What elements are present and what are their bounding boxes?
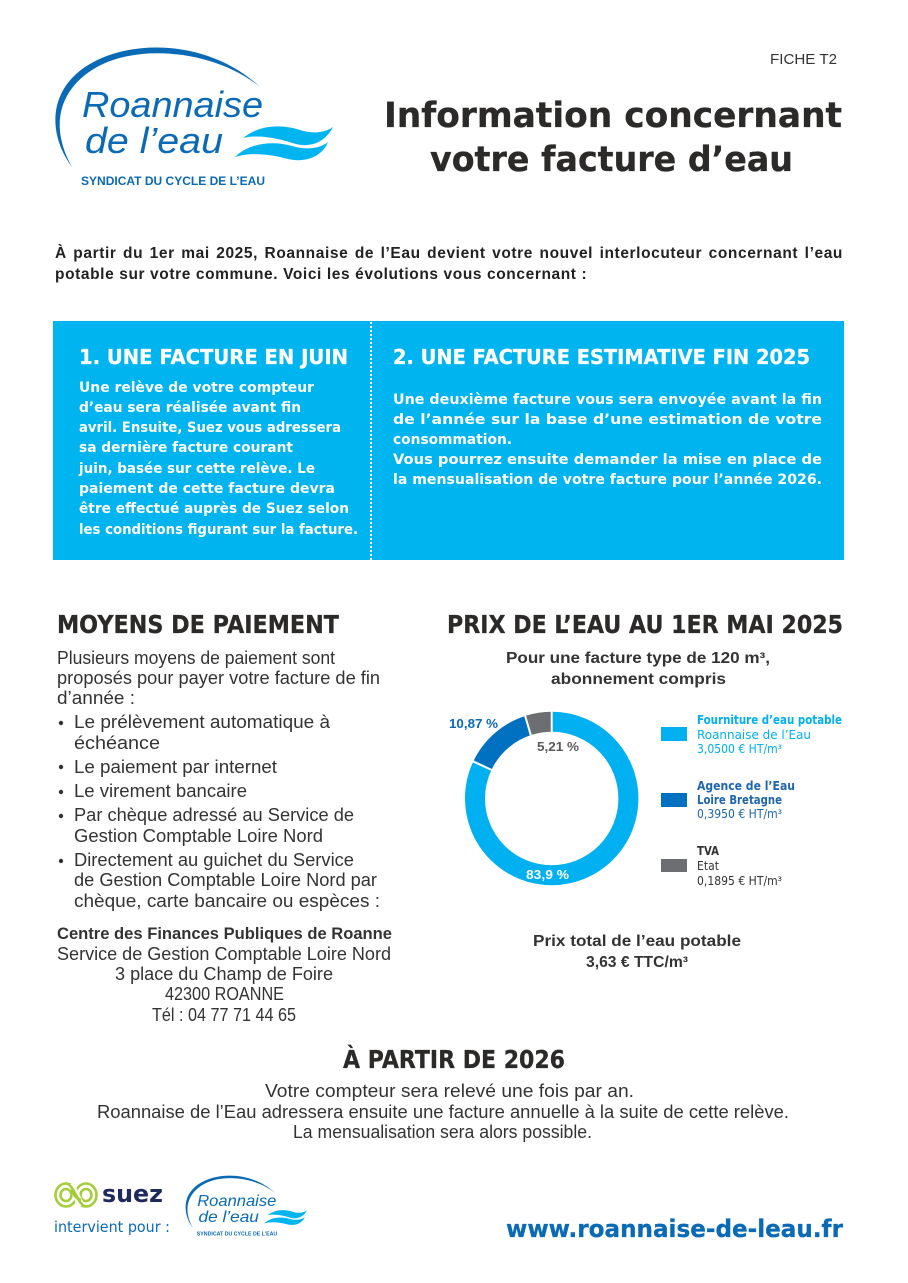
text block: moyens de paiement: de Gestion Comptable Loire Nord par <box>74 870 377 890</box>
address block: 3 place du Champ de Foire <box>115 964 333 984</box>
legend: TVA: TVA <box>697 844 720 858</box>
address block <box>57 925 392 1025</box>
text block: moyens de paiement: échéance <box>74 733 160 753</box>
text block: moyens de paiement: Le paiement par internet <box>74 757 277 777</box>
text block: à partir de 2026: La mensualisation sera alors possible. <box>293 1122 592 1142</box>
panel text: estimative <box>393 392 822 488</box>
panel heading: une facture en juin: 1. UNE FACTURE EN JUIN <box>79 345 348 369</box>
title <box>384 96 842 180</box>
fiche reference: FICHE T2 <box>770 52 837 68</box>
heading: moyens de paiement: MOYENS DE PAIEMENT <box>57 610 339 639</box>
panel text: estimative: de l’année sur la base d’une estimation de votre <box>393 412 822 428</box>
logo: Roannaise de l'Eau: Roannaise <box>82 84 263 125</box>
subtitle: facture type: Pour une facture type de 120 m³, <box>506 650 770 667</box>
text block: moyens de paiement: Directement au guichet du Service <box>74 850 354 870</box>
subtitle: facture type: abonnement compris <box>551 671 726 688</box>
address block: Service de Gestion Comptable Loire Nord <box>57 944 391 964</box>
text block: à partir de 2026 <box>97 1081 789 1142</box>
text block: moyens de paiement: Plusieurs moyens de paiement sont <box>57 648 335 668</box>
legend: agence de l'eau: Loire Bretagne <box>697 793 782 807</box>
text block: moyens de paiement: Le virement bancaire <box>74 781 247 801</box>
total price: Prix total de l’eau potable <box>533 933 741 950</box>
address block: 42300 ROANNE <box>165 984 284 1004</box>
label: 83,9 %: 83,9 % <box>526 867 569 882</box>
logo: Roannaise de l'Eau <box>55 47 333 188</box>
panel heading: facture estimative: 2. UNE FACTURE ESTIMATIVE FIN 2025 <box>393 345 810 369</box>
text block: moyens de paiement <box>57 648 380 911</box>
logo: Roannaise de l'Eau small <box>186 1176 307 1238</box>
text block: moyens de paiement: Gestion Comptable Loire Nord <box>74 826 323 846</box>
address block: Tél : 04 77 71 44 65 <box>152 1005 296 1025</box>
text block: moyens de paiement: chèque, carte bancaire ou espèces : <box>74 891 380 911</box>
panel text: juin: être effectué auprès de Suez selon <box>79 501 349 517</box>
caption: intervient pour: intervient pour : <box>54 1218 170 1236</box>
legend: fourniture d'eau potable: Roannaise de l’Eau <box>697 728 811 742</box>
introduction text <box>55 244 843 283</box>
panel: factures <box>53 321 844 560</box>
legend: TVA: Etat <box>697 859 719 873</box>
address block: Centre des Finances Publiques de Roanne <box>57 925 392 943</box>
panel text: estimative: consommation. <box>393 432 512 448</box>
panel text: juin: avril. Ensuite, Suez vous adressera <box>79 420 341 436</box>
panel text: juin: paiement de cette facture devra <box>79 481 335 497</box>
website url: www.roannaise-de-leau.fr <box>506 1215 843 1243</box>
panel text: juin: sa dernière facture courant <box>79 440 293 456</box>
logo: Suez: suez <box>102 1180 163 1208</box>
logo: Roannaise de l'Eau small: Roannaise <box>197 1193 277 1210</box>
logo: Suez <box>56 1180 163 1208</box>
legend: agence de l'eau <box>661 779 795 821</box>
legend: fourniture d'eau potable: Fourniture d’eau potable <box>697 713 842 727</box>
text block: à partir de 2026: Votre compteur sera relevé une fois par an. <box>265 1081 634 1101</box>
introduction text: potable sur votre commune. Voici les évolutions vous concernant : <box>55 266 587 283</box>
legend: agence de l'eau: 0,3950 € HT/m³ <box>697 807 782 821</box>
legend: fourniture d'eau potable <box>661 713 842 756</box>
introduction text: À partir du 1er mai 2025, Roannaise de l’Eau devient votre nouvel interlocuteur concernant l’eau <box>55 245 843 262</box>
panel text: estimative: Vous pourrez ensuite demander la mise en place de <box>393 452 822 468</box>
panel text: juin: d’eau sera réalisée avant fin <box>79 400 301 416</box>
text block: moyens de paiement: proposés pour payer votre facture de fin <box>57 668 380 688</box>
heading: prix de l'eau: PRIX DE L’EAU AU 1ER MAI 2025 <box>447 610 843 639</box>
subtitle: facture type <box>506 650 770 688</box>
panel text: juin: juin, basée sur cette relève. Le <box>78 461 315 477</box>
title: votre facture d’eau <box>430 140 793 180</box>
legend: agence de l'eau: Agence de l’Eau <box>697 779 795 793</box>
legend: fourniture d'eau potable: 3,0500 € HT/m³ <box>697 742 782 756</box>
label: 5,21 %: 5,21 % <box>537 739 579 754</box>
title: Information concernant <box>384 96 842 136</box>
donut chart <box>449 709 628 882</box>
label: 10,87 %: 10,87 % <box>449 716 498 731</box>
text block: à partir de 2026: Roannaise de l’Eau adressera ensuite une facture annuelle à la suite de cette relève. <box>97 1102 789 1122</box>
total price: 3,63 € TTC/m³ <box>586 954 688 971</box>
heading: à partir de 2026: À PARTIR DE 2026 <box>343 1045 565 1074</box>
legend: TVA: 0,1895 € HT/m³ <box>697 874 782 888</box>
legend: TVA <box>661 844 782 888</box>
panel text: estimative: Une deuxième facture vous sera envoyée avant la fin <box>393 392 822 408</box>
panel text: estimative: la mensualisation de votre facture pour l’année 2026. <box>393 472 822 488</box>
logo: Roannaise de l'Eau: de l’eau <box>85 120 223 161</box>
panel text: juin: les conditions figurant sur la facture. <box>79 522 358 538</box>
text block: moyens de paiement: Le prélèvement automatique à <box>74 712 331 732</box>
text block: moyens de paiement: Par chèque adressé au Service de <box>74 805 354 825</box>
logo: Roannaise de l'Eau small: SYNDICAT DU CYCLE DE L’EAU <box>197 1232 278 1238</box>
total price <box>533 933 741 971</box>
text block: moyens de paiement: d’année : <box>57 688 135 708</box>
logo: Roannaise de l'Eau: SYNDICAT DU CYCLE DE L’EAU <box>81 176 265 188</box>
panel text: juin <box>78 380 358 538</box>
panel text: juin: Une relève de votre compteur <box>79 380 315 396</box>
logo: Roannaise de l'Eau small: de l’eau <box>199 1209 259 1226</box>
